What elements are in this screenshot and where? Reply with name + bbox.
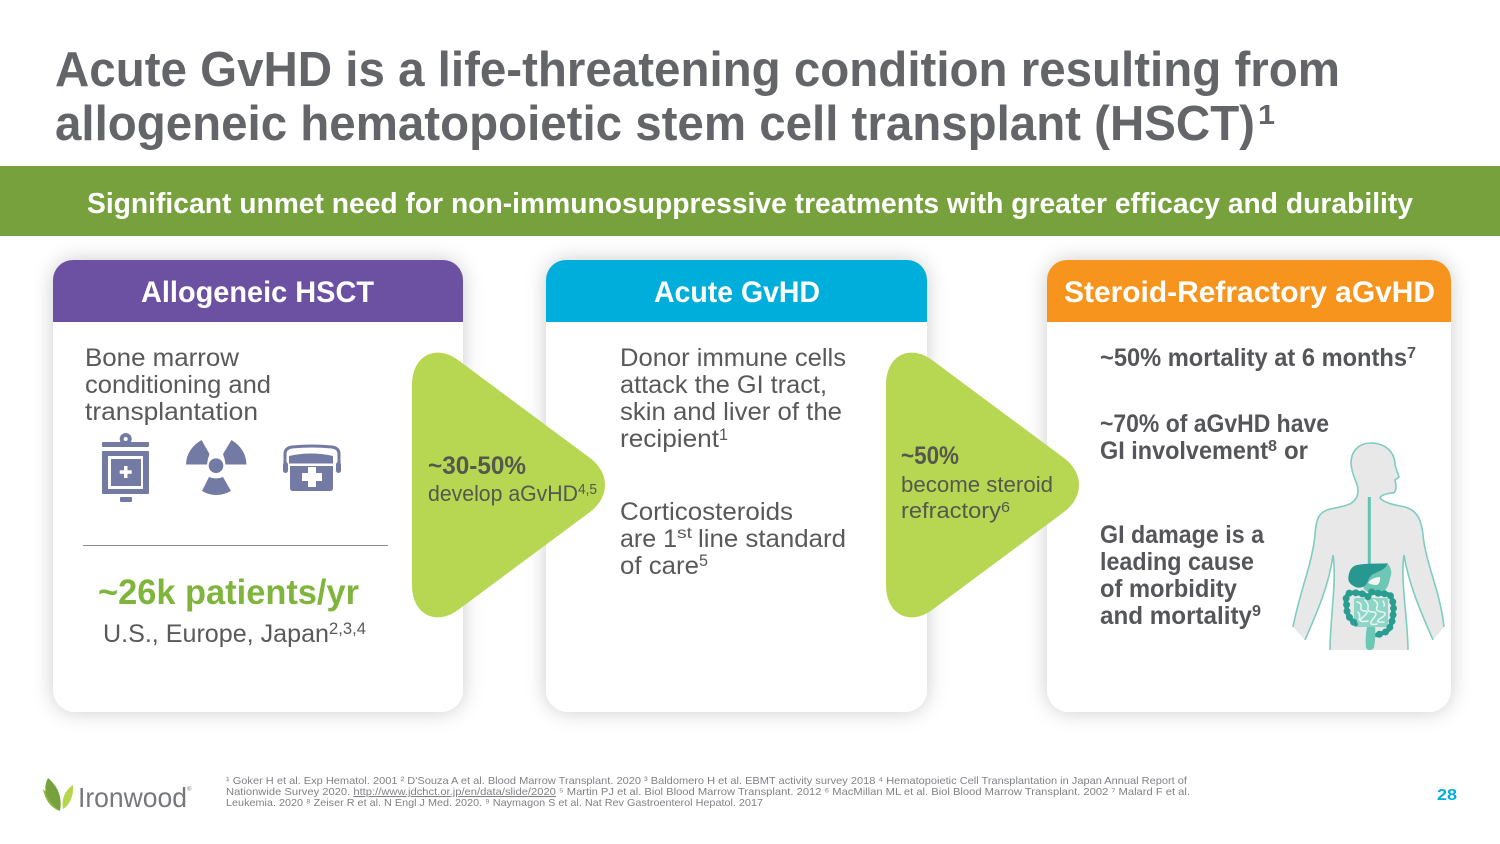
icon: radiation [186, 440, 246, 495]
footnotes [226, 775, 1190, 809]
header: Allogeneic HSCT [53, 260, 463, 322]
stomach [1363, 564, 1391, 594]
text: GI damage: and mortality [1100, 602, 1252, 630]
text: GI damage: GI damage is a [1100, 521, 1265, 549]
header: Acute GvHD: Acute GvHD [654, 276, 820, 309]
panel: Acute GvHD [546, 260, 927, 712]
text: corticosteroids: Corticosteroids [620, 498, 793, 526]
stat: 26k patients: ~26k patients/yr [98, 573, 359, 612]
arrow label: 50%: become steroid [901, 472, 1053, 497]
text: bone marrow conditioning: Bone marrow [85, 344, 240, 372]
text: corticosteroids [620, 498, 846, 580]
large intestine [1346, 592, 1394, 635]
arrow label: 50%: ~50% [901, 442, 959, 470]
icon: IV bag [102, 433, 149, 502]
logo: Ironwood [43, 778, 192, 813]
arrow: to Acute GvHD [412, 353, 605, 617]
logo: Ironwood: Ironwood [78, 782, 187, 813]
footnotes: ¹ Goker H et al. Exp Hematol. 2001 ² D'Souza A et al. Blood Marrow Transplant. 2020 ³ Baldomero H et al. EBMT activity survey 2018 ⁴ Hematopoietic Cell Transplantation in Japan Annual Report of [226, 775, 1187, 787]
green banner [0, 166, 1500, 236]
stat: mortality: ~50% mortality at 6 months [1100, 344, 1407, 372]
text: corticosteroids: line standard [698, 525, 846, 553]
title: allogeneic hematopoietic stem cell transplant (HSCT) [55, 97, 1255, 151]
text: GI damage: 9 [1252, 603, 1261, 620]
arrow label: 30-50%: 4,5 [578, 481, 597, 498]
text: bone marrow conditioning: conditioning and [85, 371, 271, 399]
divider [83, 545, 388, 546]
text: GI damage: leading cause [1100, 548, 1254, 576]
text: GI damage [1100, 521, 1265, 630]
logo: Ironwood: ® [187, 786, 192, 793]
text: bone marrow conditioning [85, 344, 271, 426]
text: donor immune cells [620, 344, 846, 453]
arrow label: 30-50% [428, 452, 597, 506]
arrow label: 30-50%: develop aGvHD [428, 481, 578, 506]
stat: mortality: 7 [1407, 345, 1416, 362]
panel: Allogeneic HSCT [53, 260, 463, 712]
arrow label: 30-50%: ~30-50% [428, 452, 526, 480]
icon: medical cooler [283, 446, 341, 491]
text: donor immune cells: attack the GI tract, [620, 371, 827, 399]
stat: GI involvement: or [1284, 437, 1308, 465]
text: donor immune cells: recipient [620, 425, 719, 453]
green banner: Significant unmet need for non-immunosuppressive treatments with greater efficacy and durability [87, 188, 1413, 220]
stomach gap [1368, 577, 1380, 585]
text: GI damage: of morbidity [1100, 575, 1237, 603]
footnotes: Leukemia. 2020 ⁸ Zeiser R et al. N Engl J Med. 2020. ⁹ Naymagon S et al. Nat Rev Gastroenterol Hepatol. 2017 [226, 797, 763, 809]
stat: GI involvement: 8 [1268, 438, 1277, 455]
esophagus [1368, 497, 1371, 565]
header: Allogeneic HSCT: Allogeneic HSCT [141, 276, 374, 309]
page number: 28 [1437, 787, 1457, 804]
stat: GI involvement: ~70% of aGvHD have [1100, 410, 1329, 438]
header: Steroid-Refractory aGvHD: Steroid-Refractory aGvHD [1064, 276, 1435, 309]
text: donor immune cells: skin and liver of the [620, 398, 842, 426]
text: corticosteroids: 5 [699, 551, 708, 570]
text: bone marrow conditioning: transplantation [85, 398, 258, 426]
small intestine [1354, 598, 1388, 627]
text: donor immune cells: 1 [719, 425, 728, 444]
arrow label: 50% [901, 442, 1053, 523]
rectum [1366, 627, 1375, 650]
text: regions: U.S., Europe, Japan [103, 620, 329, 648]
footnotes: Nationwide Survey 2020. http://www.jdchct.or.jp/en/data/slide/2020 ⁵ Martin PJ et al. Biol Blood Marrow Transplant. 2012 ⁶ MacMillan ML et al. Biol Blood Marrow Transplant. 2002 ⁷ Malard F et al. [226, 786, 1190, 798]
arrow label: 50%: 6 [1001, 499, 1010, 516]
stat: GI involvement [1100, 410, 1329, 465]
text: corticosteroids: are 1 [620, 525, 677, 553]
title: Acute GvHD is a life-threatening condition resulting from [55, 43, 1340, 97]
text: corticosteroids: of care [620, 552, 699, 580]
text: donor immune cells: Donor immune cells [620, 344, 846, 372]
panel: Steroid-Refractory aGvHD [1047, 260, 1451, 712]
arrow: to Steroid-Refractory [886, 353, 1079, 617]
header: Acute GvHD [546, 260, 927, 322]
title [55, 43, 1340, 151]
icon: human body with GI tract [1293, 443, 1444, 650]
title: 1 [1258, 99, 1275, 130]
header: Steroid-Refractory aGvHD [1047, 260, 1451, 322]
text: regions: 2,3,4 [329, 619, 366, 638]
liver [1348, 563, 1388, 588]
arrow label: 50%: refractory [901, 498, 1001, 523]
stat: GI involvement: GI involvement [1100, 437, 1269, 465]
text: corticosteroids: st [677, 525, 693, 542]
